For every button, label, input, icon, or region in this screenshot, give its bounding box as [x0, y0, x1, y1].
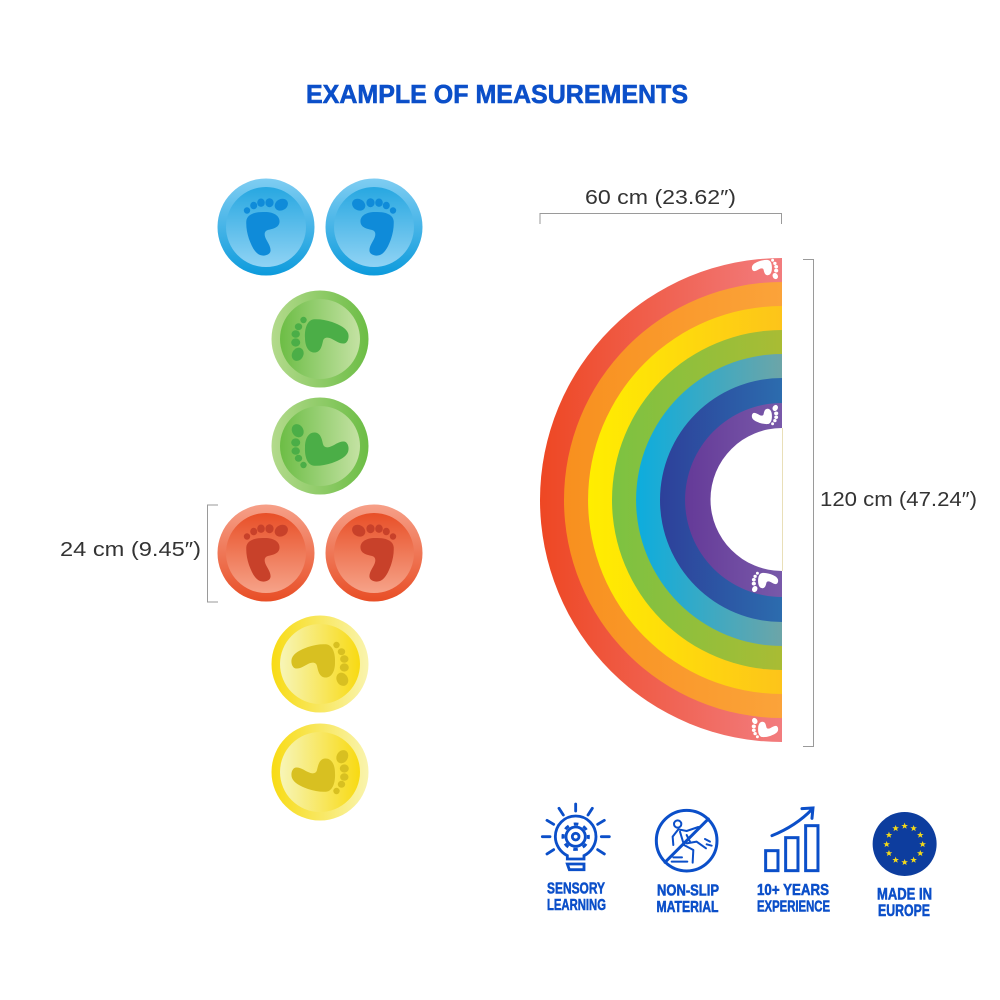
red circle right foot — [326, 504, 422, 602]
icon: experience growth chart — [766, 808, 818, 871]
white foot top — [752, 259, 779, 280]
label: sensory learning: LEARNING — [547, 897, 606, 914]
circle height bracket — [208, 505, 218, 602]
label: made in europe: MADE IN — [877, 886, 932, 904]
yellow circle lower — [272, 724, 368, 820]
label: made in europe — [877, 886, 932, 920]
label: 10+ years experience: 10+ YEARS — [757, 882, 829, 899]
label: non-slip material: NON-SLIP — [657, 882, 719, 900]
label: 10+ years experience — [757, 882, 830, 916]
label: non-slip material — [656, 882, 719, 916]
red circle left foot — [218, 504, 314, 602]
blue circle left foot — [218, 178, 314, 276]
rainbow half-circle — [540, 258, 782, 742]
yellow circle upper — [272, 616, 368, 712]
label: sensory learning: SENSORY — [547, 880, 605, 898]
label: sensory learning — [547, 880, 606, 914]
white foot inner upper — [752, 404, 779, 425]
label: non-slip material: MATERIAL — [656, 899, 719, 916]
label: made in europe: EUROPE — [878, 902, 930, 920]
white foot inner lower — [751, 572, 778, 593]
white foot bottom — [751, 717, 778, 738]
icon: EU flag — [873, 812, 937, 876]
rainbow height label: 120 cm (47.24″) — [820, 489, 977, 511]
green circle lower — [272, 398, 368, 494]
rainbow height bracket — [803, 260, 814, 746]
rainbow width label: 60 cm (23.62″) — [585, 187, 736, 209]
title: EXAMPLE OF MEASUREMENTS — [306, 79, 688, 109]
circle size label: 24 cm (9.45″) — [60, 539, 201, 561]
label: 10+ years experience: EXPERIENCE — [757, 898, 830, 916]
blue circle right foot — [326, 178, 422, 276]
icon: sensory learning bulb — [542, 804, 609, 870]
panel: footprint circles — [218, 178, 422, 820]
green circle upper — [272, 290, 368, 388]
icon: non-slip prohibited figure — [656, 810, 717, 871]
rainbow width bracket — [540, 214, 782, 224]
